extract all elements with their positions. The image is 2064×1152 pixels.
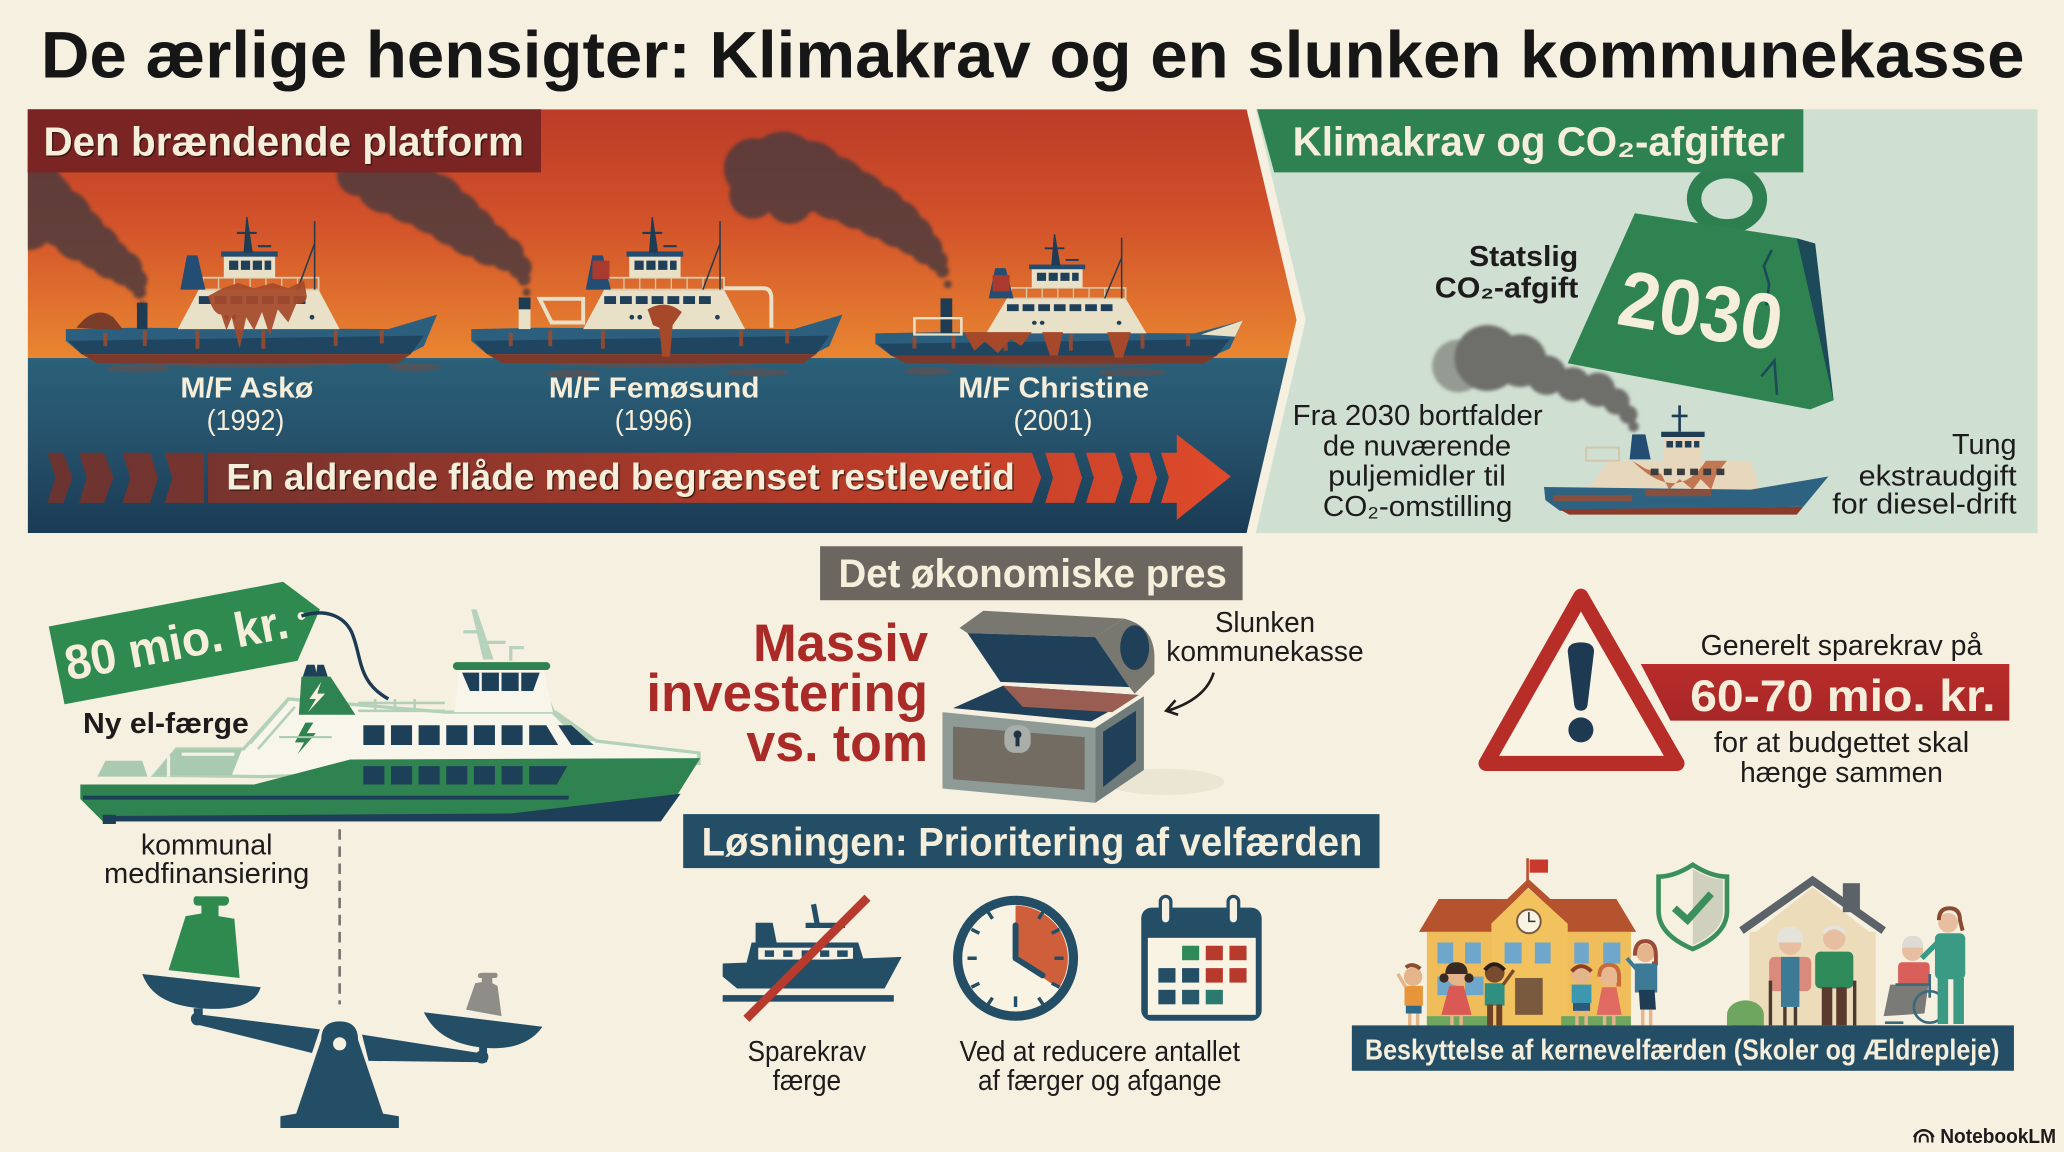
text: tung ekstraudgift — [1832, 429, 2017, 520]
heading: det økonomiske pres: Det økonomiske pres — [839, 552, 1227, 596]
illustration: school with children — [1398, 858, 1657, 1025]
icon: large green weight — [169, 896, 240, 978]
text: fra 2030 bortfalder: de nuværende — [1323, 430, 1511, 462]
label: statslig CO2-afgift: CO₂-afgift — [1435, 272, 1579, 304]
price tag: 80 mio. kr.: 80 mio. kr. — [60, 595, 293, 691]
text: fra 2030 bortfalder: CO₂-omstilling — [1323, 491, 1512, 523]
ship: M/F Christine — [875, 234, 1243, 364]
icon: small rusty ship — [1544, 405, 1828, 515]
label: slunken kommunekasse: Slunken — [1215, 607, 1315, 639]
elderly man — [1815, 927, 1855, 1025]
ship name: M/F Askø: M/F Askø — [180, 372, 314, 404]
label: statslig CO2-afgift: Statslig — [1469, 241, 1578, 273]
icon: small grey weight — [466, 973, 502, 1016]
label: kommunal medfinansiering — [104, 829, 309, 890]
arrow: pointing to chest — [1166, 673, 1214, 715]
label: kommunal medfinansiering: medfinansiering — [104, 858, 309, 890]
callout: generelt sparekrav: 60-70 mio. kr. — [1690, 671, 1996, 721]
text: tung ekstraudgift: Tung — [1952, 429, 2017, 461]
new electric ferry with price tag — [49, 582, 700, 824]
panel: den brændende platform — [3, 109, 1304, 533]
icon: electric ferry — [80, 609, 700, 824]
text: massiv investering vs. tom: investering — [646, 664, 928, 723]
illustration: elderly home and care — [1727, 881, 1965, 1029]
text: for at budgettet: hænge sammen — [1740, 757, 1943, 789]
ship: M/F Askø — [66, 217, 437, 363]
ship name: M/F Femøsund: M/F Femøsund — [549, 372, 760, 404]
text: sparekrav færge: færge — [773, 1065, 841, 1097]
text: tung ekstraudgift: ekstraudgift — [1859, 461, 2017, 493]
text: for at budgettet — [1714, 727, 1969, 789]
sky and sea background — [28, 109, 1304, 533]
smoke plumes — [3, 132, 952, 309]
label: ny el-færge: Ny el-færge — [83, 708, 249, 740]
icon: warning triangle — [1486, 596, 1677, 763]
text: fra 2030 bortfalder: Fra 2030 bortfalder — [1293, 400, 1543, 432]
tab heading: klimakrav og CO2-afgifter — [1257, 109, 1803, 172]
icon: balance scale — [142, 829, 542, 1128]
text: massiv investering vs. tom — [646, 614, 929, 773]
banner: 60-70 mio. kr. — [1641, 664, 2009, 721]
text: tung ekstraudgift: for diesel-drift — [1832, 488, 2017, 520]
title: De ærlige hensigter: Klimakrav og en slunken kommunekasse — [41, 18, 2024, 92]
ship: M/F Femøsund — [471, 217, 842, 363]
tab heading: klimakrav og CO2-afgifter: Klimakrav og CO₂-afgifter — [1293, 118, 1785, 164]
heading: løsningen: Løsningen: Prioritering af velfærden — [702, 821, 1362, 865]
weight: 2030: 2030 — [1612, 254, 1789, 368]
arrow: aging fleet — [47, 434, 1231, 520]
label: statslig CO2-afgift — [1435, 241, 1579, 304]
text: massiv investering vs. tom: vs. tom — [746, 714, 928, 773]
elderly woman — [1769, 927, 1811, 1025]
text: massiv investering vs. tom: Massiv — [753, 614, 929, 673]
logo: NotebookLM: NotebookLM — [1940, 1126, 2056, 1148]
text: fra 2030 bortfalder — [1293, 400, 1543, 523]
ship name: M/F Christine: M/F Christine — [958, 372, 1149, 404]
text: ved at reducere antallet — [960, 1036, 1240, 1097]
callout: generelt sparekrav: Generelt sparekrav på — [1701, 630, 1983, 662]
text: fra 2030 bortfalder: puljemidler til — [1328, 461, 1506, 493]
ship year: 1992: (1992) — [207, 405, 284, 437]
label: slunken kommunekasse — [1166, 607, 1364, 668]
text: sparekrav færge — [748, 1036, 867, 1097]
icon: empty treasure chest — [942, 611, 1224, 803]
price tag: 80 mio. kr. — [49, 582, 388, 704]
icon: clock with reduced time — [958, 900, 1073, 1016]
ship year: 1996: (1996) — [615, 405, 692, 437]
label: kommunal medfinansiering: kommunal — [141, 829, 273, 861]
panel: klimakrav og CO2-afgifter — [1256, 109, 2038, 533]
banner: beskyttelse af kernevelfærden — [1352, 1025, 2014, 1071]
text: ved at reducere antallet: af færger og afgange — [978, 1065, 1222, 1097]
text: sparekrav færge: Sparekrav — [748, 1036, 867, 1068]
ship year: 2001: (2001) — [1014, 405, 1093, 437]
wheelchair and nurse — [1884, 908, 1965, 1024]
smoke from small ship — [1432, 325, 1639, 432]
icon: crossed out ferry — [723, 898, 902, 1019]
arrow: aging fleet: En aldrende flåde med begrænset restlevetid — [226, 457, 1015, 498]
callout: generelt sparekrav — [1641, 630, 2009, 789]
label: slunken kommunekasse: kommunekasse — [1166, 636, 1364, 668]
icon: calendar — [1141, 896, 1262, 1021]
children and teacher — [1398, 941, 1657, 1025]
tab heading: den brændende platform: Den brændende platform — [43, 118, 524, 164]
tab heading: den brændende platform — [28, 109, 541, 172]
weight: 2030 — [1568, 171, 1834, 409]
text: for at budgettet: for at budgettet skal — [1714, 727, 1969, 759]
icon: shield with check — [1659, 865, 1727, 949]
text: ved at reducere antallet: Ved at reducere antallet — [960, 1036, 1240, 1068]
